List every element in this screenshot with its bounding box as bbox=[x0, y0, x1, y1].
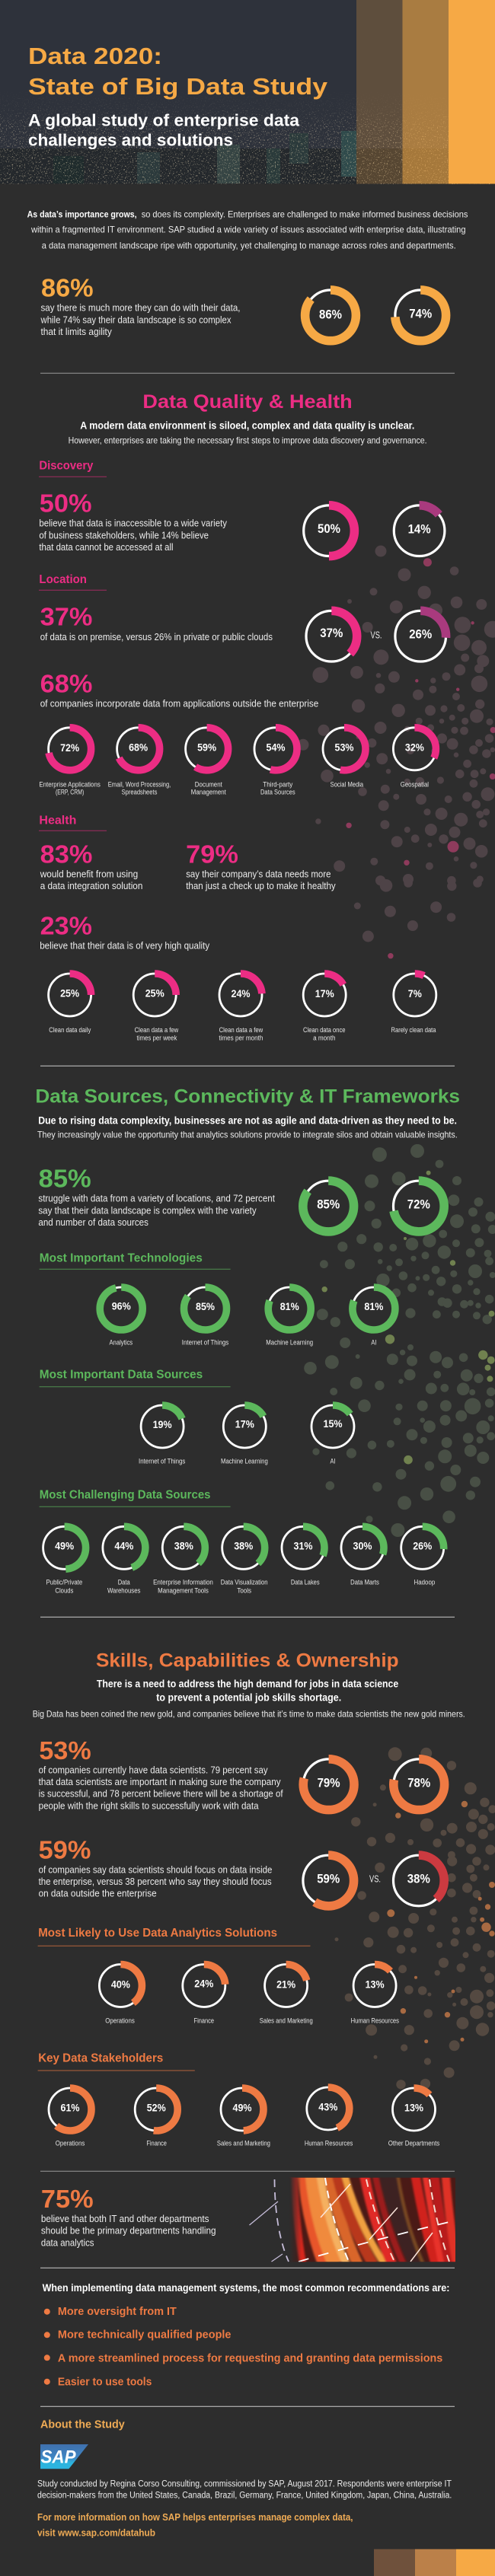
ring: 43% human resources bbox=[307, 2087, 350, 2130]
ring captions: Clean data once bbox=[303, 1026, 346, 1035]
ring group: cleaning frequency bbox=[49, 974, 436, 1043]
vs label: VS. bbox=[370, 629, 382, 640]
title: Data 2020: bbox=[28, 43, 162, 69]
vs label: VS. bbox=[369, 1873, 381, 1884]
subheading: Health: Health bbox=[39, 815, 76, 827]
stat: 83%: a data integration solution bbox=[40, 880, 142, 891]
call to action: For more information on how SAP helps enterprises manage complex data, bbox=[37, 2511, 353, 2523]
stat: 75%: data analytics bbox=[41, 2236, 94, 2248]
intro text: As data’s importance grows, bbox=[27, 209, 137, 220]
subheading: Key Data Stakeholders: Key Data Stakeholders bbox=[38, 2052, 163, 2064]
ring captions: Geospatial bbox=[401, 780, 429, 789]
subheading: Most Important Data Sources: Most Important Data Sources bbox=[40, 1368, 203, 1381]
ring captions: Other Departments bbox=[388, 2139, 439, 2147]
stat: 53%: that data scientists are important in making sure the company bbox=[39, 1776, 281, 1787]
orange stripe 1 bbox=[356, 0, 402, 184]
ring: 79%: 79% bbox=[318, 1777, 340, 1790]
intro text bbox=[27, 209, 468, 250]
ring captions: Rarely clean data bbox=[391, 1026, 436, 1035]
ring group: challenging sources bbox=[43, 1526, 444, 1595]
ring: 24% finance bbox=[183, 1964, 225, 2007]
ring captions: Operations bbox=[56, 2139, 85, 2147]
ring captions: Internet of Things bbox=[139, 1458, 186, 1466]
ring: 85% internet of things bbox=[184, 1287, 227, 1330]
subheading: Location: Location bbox=[39, 573, 87, 586]
ring: 68% email: 68% bbox=[129, 741, 148, 753]
stat: 83%: would benefit from using bbox=[40, 868, 138, 879]
ring captions: a month bbox=[313, 1035, 335, 1043]
ring: 14%: 14% bbox=[408, 523, 431, 537]
call to action bbox=[37, 2511, 353, 2539]
stat: 53%: 53% bbox=[39, 1736, 91, 1765]
stat: 85%: and number of data sources bbox=[38, 1216, 148, 1228]
ring: 72% bbox=[393, 1181, 444, 1232]
ring captions: Public/Private bbox=[46, 1579, 82, 1587]
ring captions: Data Visualization bbox=[221, 1579, 268, 1587]
ring: 50% bbox=[304, 505, 354, 556]
ring: 81% machine learning bbox=[268, 1287, 311, 1330]
ring captions: Data bbox=[118, 1579, 130, 1587]
ring: 96% analytics bbox=[100, 1287, 142, 1330]
subheading: Health bbox=[39, 815, 107, 831]
ring captions: Clouds bbox=[55, 1586, 74, 1595]
header banner bbox=[0, 0, 495, 184]
ring captions: Clean data a few bbox=[135, 1026, 178, 1035]
ring group: application sources bbox=[39, 728, 436, 797]
stat: 23% bbox=[40, 912, 210, 952]
ring: 86%: 86% bbox=[319, 308, 342, 321]
ring captions: Human Resources bbox=[305, 2139, 353, 2147]
ring: 50%: 50% bbox=[318, 522, 340, 536]
ring captions: Warehouses bbox=[107, 1586, 141, 1595]
orange stripe 3 bbox=[449, 0, 495, 184]
ring: 74% bbox=[395, 290, 446, 341]
ring: 19% internet of things: 19% bbox=[153, 1418, 172, 1430]
ring: 61% operations: 61% bbox=[61, 2101, 80, 2113]
title: State of Big Data Study bbox=[28, 73, 328, 100]
ring: 24% few times monthly bbox=[219, 974, 262, 1016]
ring captions: Human Resources bbox=[351, 2016, 399, 2025]
ring: 85%: 85% bbox=[317, 1198, 340, 1212]
stat: 86%: say there is much more they can do with their data, bbox=[41, 302, 241, 314]
stat: 59%: on data outside the enterprise bbox=[39, 1888, 157, 1899]
orange stripe 2 bbox=[402, 0, 449, 184]
stat: 50%: 50% bbox=[40, 489, 92, 517]
section intro: Due to rising data complexity, businesses are not as agile and data-driven as they need to be. bbox=[38, 1115, 457, 1127]
ring: 26% bbox=[395, 611, 446, 662]
ring: 26%: 26% bbox=[409, 628, 432, 642]
ring captions: Sales and Marketing bbox=[260, 2016, 313, 2025]
about text bbox=[37, 2480, 452, 2500]
ring: 85% bbox=[303, 1181, 354, 1232]
ring: 40% operations bbox=[99, 1964, 142, 2007]
ring group: technologies bbox=[100, 1287, 395, 1347]
ring: 79% bbox=[303, 1759, 354, 1810]
ring group: data sources bbox=[139, 1405, 354, 1466]
subtitle bbox=[28, 111, 300, 150]
ring captions: (ERP, CRM) bbox=[56, 789, 84, 797]
ring: 7% rarely: 7% bbox=[408, 987, 422, 999]
stat: 59% bbox=[39, 1835, 272, 1899]
ring: 54% third-party: 54% bbox=[267, 741, 286, 753]
ring: 81% AI: 81% bbox=[364, 1300, 384, 1312]
subheading: Most Important Technologies: Most Important Technologies bbox=[40, 1251, 203, 1264]
ring: 7% rarely bbox=[394, 974, 436, 1016]
footer stripes bbox=[374, 2549, 495, 2576]
bullet: more oversight: More oversight from IT bbox=[58, 2305, 177, 2318]
ring: 25% daily bbox=[49, 974, 91, 1016]
section intro: to prevent a potential job skills shortage. bbox=[156, 1692, 341, 1704]
city skyline photo bbox=[0, 90, 495, 184]
ring: 15% AI bbox=[311, 1405, 354, 1448]
ring: 81% machine learning: 81% bbox=[280, 1300, 299, 1312]
ring: 38% EIM tools: 38% bbox=[174, 1539, 193, 1551]
section heading: Data Quality & Health: Data Quality & Health bbox=[142, 391, 353, 413]
ring: 49% sales and marketing: 49% bbox=[233, 2102, 252, 2114]
ring: 17% machine learning: 17% bbox=[235, 1417, 254, 1430]
stat: 68%: of companies incorporate data from applications outside the enterprise bbox=[40, 697, 318, 709]
ring: 38%: 38% bbox=[407, 1873, 430, 1886]
ring captions: Data Lakes bbox=[291, 1579, 320, 1587]
ring captions: Tools bbox=[237, 1586, 251, 1595]
ring: 24% finance: 24% bbox=[194, 1978, 214, 1990]
stat: 37%: of data is on premise, versus 26% in private or public clouds bbox=[40, 631, 273, 642]
section intro: A modern data environment is siloed, complex and data quality is unclear. bbox=[80, 420, 414, 432]
stat: 37% bbox=[40, 603, 273, 642]
subheading: Most Challenging Data Sources: Most Challenging Data Sources bbox=[40, 1488, 211, 1501]
ring group: analytics users bbox=[99, 1964, 399, 2025]
ring: 74%: 74% bbox=[409, 308, 432, 321]
ring captions: Enterprise Information bbox=[153, 1579, 213, 1587]
stat: 86%: 86% bbox=[41, 273, 94, 301]
ring captions: Clean data a few bbox=[219, 1026, 263, 1035]
ring: 38% bbox=[393, 1855, 444, 1906]
ring: 21% sales and marketing: 21% bbox=[276, 1978, 296, 1990]
ring: 52% finance: 52% bbox=[147, 2101, 166, 2113]
stat: 85% bbox=[38, 1165, 275, 1228]
ring captions: Document bbox=[195, 780, 222, 789]
icon: SAP logo bbox=[40, 2444, 88, 2469]
stat: 79%: say their company’s data needs more bbox=[186, 868, 331, 879]
decorative dots: pink cluster bbox=[297, 545, 495, 942]
ring: 13% other departments bbox=[393, 2088, 436, 2131]
ring: 49% public/private clouds bbox=[43, 1526, 86, 1569]
stat: 23%: believe that their data is of very high quality bbox=[40, 940, 210, 952]
bullet: streamlined process: A more streamlined process for requesting and granting data permissions bbox=[58, 2351, 442, 2364]
stat: 85%: struggle with data from a variety of locations, and 72 percent bbox=[38, 1193, 275, 1204]
section heading: Skills, Capabilities & Ownership: Skills, Capabilities & Ownership bbox=[96, 1650, 399, 1671]
ring: 31% data lakes: 31% bbox=[294, 1539, 313, 1551]
stat: 50%: that data cannot be accessed at all bbox=[39, 541, 174, 553]
ring: 72% enterprise applications bbox=[49, 728, 91, 770]
ring: 14% bbox=[394, 505, 445, 556]
ring group: stakeholders bbox=[49, 2087, 439, 2147]
section intro bbox=[37, 1115, 458, 1140]
ring captions: times per week bbox=[137, 1035, 177, 1043]
decorative dots: orange cluster bbox=[335, 1747, 495, 2089]
ring captions: Machine Learning bbox=[221, 1458, 268, 1466]
ring: 25% weekly: 25% bbox=[145, 987, 164, 999]
stat: 75% bbox=[41, 2185, 216, 2248]
ring: 38% EIM tools bbox=[162, 1526, 205, 1569]
ring: 30% data marts bbox=[341, 1526, 384, 1569]
ring captions bbox=[46, 1579, 435, 1595]
ring: 44% data warehouses bbox=[103, 1526, 145, 1569]
ring: 59% document management bbox=[186, 728, 228, 770]
ring: 26% hadoop: 26% bbox=[413, 1539, 433, 1551]
ring captions: Email, Word Processing, bbox=[108, 780, 171, 789]
ring: 25% weekly bbox=[133, 974, 176, 1016]
ring: 37% bbox=[306, 611, 357, 662]
stat: 37%: 37% bbox=[40, 603, 93, 631]
stat: 86%: that it limits agility bbox=[41, 326, 112, 337]
ring captions bbox=[139, 1458, 335, 1466]
ring captions bbox=[105, 2016, 399, 2025]
photo: light trails bbox=[250, 2173, 457, 2265]
ring: 21% sales and marketing bbox=[265, 1964, 308, 2007]
bullet: easier tools: Easier to use tools bbox=[58, 2375, 152, 2388]
stat: 68%: 68% bbox=[40, 670, 93, 698]
stat: 53% bbox=[39, 1736, 283, 1812]
stat: 79%: 79% bbox=[186, 840, 238, 868]
bullet: more qualified people: More technically qualified people bbox=[58, 2329, 232, 2342]
stat: 79% bbox=[186, 840, 336, 891]
ring: 78% bbox=[394, 1759, 445, 1810]
ring: 15% AI: 15% bbox=[323, 1417, 343, 1430]
intro text: so does its complexity. Enterprises are challenged to make informed business decisions bbox=[142, 209, 468, 220]
ring: 37%: 37% bbox=[320, 626, 343, 640]
ring: 59% bbox=[303, 1855, 354, 1906]
ring: 13% human resources: 13% bbox=[366, 1978, 385, 1990]
ring: 40% operations: 40% bbox=[111, 1978, 130, 1990]
ring captions bbox=[109, 1339, 376, 1347]
ring: 17% machine learning bbox=[223, 1405, 266, 1448]
ring: 61% operations bbox=[49, 2088, 91, 2131]
ring: 44% data warehouses: 44% bbox=[114, 1539, 134, 1551]
ring: 86% bbox=[305, 290, 356, 341]
ring captions: Spreadsheets bbox=[122, 789, 158, 797]
ring captions: Data Marts bbox=[350, 1579, 379, 1587]
ring captions: Hadoop bbox=[414, 1579, 435, 1587]
ring captions: Enterprise Applications bbox=[39, 780, 101, 789]
ring: 32% geospatial bbox=[393, 728, 436, 770]
ring: 59% document management: 59% bbox=[197, 741, 217, 753]
subheading: Discovery bbox=[39, 460, 107, 477]
stat: 23%: 23% bbox=[40, 912, 92, 940]
subtitle: challenges and solutions bbox=[28, 131, 233, 150]
ring captions: times per month bbox=[219, 1035, 263, 1043]
ring captions: Management bbox=[191, 789, 226, 797]
stat: 86%: while 74% say their data landscape is so complex bbox=[40, 314, 232, 325]
intro text: within a fragmented IT environment. SAP studied a wide variety of issues associated with enterprise data, illustrating bbox=[30, 225, 466, 235]
stat: 50%: believe that data is inaccessible to a wide variety bbox=[39, 518, 227, 529]
ring: 52% finance bbox=[135, 2088, 177, 2131]
ring: 53% social media bbox=[323, 728, 366, 770]
stat: 86% bbox=[40, 273, 241, 337]
title bbox=[28, 43, 328, 100]
about text: Study conducted by Regina Corso Consulting, commissioned by SAP, August 2017. Respondents were enterprise IT bbox=[37, 2480, 452, 2489]
ring captions: Sales and Marketing bbox=[217, 2139, 270, 2147]
ring: 85% internet of things: 85% bbox=[196, 1300, 215, 1312]
ring captions bbox=[39, 780, 429, 797]
ring captions: AI bbox=[371, 1339, 376, 1347]
ring captions: Machine Learning bbox=[266, 1339, 313, 1347]
stat: 75%: 75% bbox=[41, 2185, 94, 2213]
subheading: Discovery: Discovery bbox=[39, 460, 93, 473]
ring: 54% third-party bbox=[254, 728, 297, 770]
dashed lane line bbox=[274, 2179, 289, 2262]
ring captions: AI bbox=[331, 1458, 335, 1466]
ring captions: Social Media bbox=[331, 780, 364, 789]
stat: 75%: should be the primary departments handling bbox=[41, 2225, 216, 2236]
subheading: Most Likely to Use Data Analytics Solutions: Most Likely to Use Data Analytics Solutions bbox=[38, 1927, 277, 1940]
ring: 59%: 59% bbox=[317, 1873, 340, 1886]
ring: 30% data marts: 30% bbox=[353, 1539, 372, 1551]
heading: About the Study: About the Study bbox=[40, 2418, 125, 2431]
ring: 17% monthly: 17% bbox=[315, 987, 334, 999]
stat: 75%: believe that both IT and other departments bbox=[41, 2213, 209, 2224]
ring captions: Clean data daily bbox=[49, 1026, 91, 1035]
ring: 13% human resources bbox=[353, 1964, 396, 2007]
about text: decision-makers from the United States, Canada, Brazil, Germany, France, United Kingdom, Japan, China, Australia. bbox=[37, 2491, 452, 2500]
recommendations heading: When implementing data management systems, the most common recommendations are: bbox=[43, 2282, 449, 2294]
decorative dots: pink accents bbox=[346, 558, 495, 958]
ring: 96% analytics: 96% bbox=[112, 1300, 131, 1312]
section intro bbox=[33, 1679, 465, 1719]
ring: 17% monthly bbox=[303, 974, 346, 1016]
ring: 31% data lakes bbox=[282, 1526, 324, 1569]
stat: 79%: than just a check up to make it healthy bbox=[186, 880, 336, 891]
icon: SAP logo: SAP bbox=[41, 2447, 76, 2468]
section intro: There is a need to address the high demand for jobs in data science bbox=[97, 1679, 399, 1690]
stat: 59%: the enterprise, versus 38 percent who say they should focus bbox=[39, 1876, 272, 1887]
stat: 50% bbox=[39, 489, 227, 553]
ring captions: Finance bbox=[194, 2016, 214, 2025]
recommendations list bbox=[44, 2305, 442, 2388]
ring: 81% AI bbox=[353, 1287, 395, 1330]
ring captions: Finance bbox=[146, 2139, 167, 2147]
stat: 53%: of companies currently have data scientists. 79 percent say bbox=[39, 1764, 268, 1775]
ring captions: Data Sources bbox=[260, 789, 295, 797]
stat: 53%: people with the right skills to successfully work with data bbox=[39, 1800, 259, 1812]
ring captions bbox=[49, 1026, 436, 1043]
ring captions: Third-party bbox=[263, 780, 292, 789]
ring: 72% enterprise applications: 72% bbox=[60, 741, 80, 754]
stat: 53%: is successful, and 78 percent believe there will be a shortage of bbox=[39, 1788, 283, 1800]
ring: 49% sales and marketing bbox=[221, 2088, 263, 2131]
ring: 13% other departments: 13% bbox=[404, 2101, 423, 2113]
stat: 50%: of business stakeholders, while 14% believe bbox=[39, 529, 209, 540]
ring: 25% daily: 25% bbox=[60, 987, 80, 999]
stat: 85%: 85% bbox=[39, 1165, 91, 1193]
ring: 49% public/private clouds: 49% bbox=[55, 1539, 75, 1551]
ring: 38% visualization tools: 38% bbox=[234, 1539, 254, 1551]
decorative dots: orange accents bbox=[387, 1801, 495, 2043]
ring: 19% internet of things bbox=[141, 1405, 184, 1448]
stat: 85%: say that their data landscape is complex with the variety bbox=[38, 1204, 257, 1216]
stat: 59%: 59% bbox=[39, 1835, 91, 1863]
stat: 59%: of companies say data scientists should focus on data inside bbox=[39, 1863, 272, 1875]
subtitle: A global study of enterprise data bbox=[28, 111, 300, 130]
ring: 24% few times monthly: 24% bbox=[232, 987, 251, 999]
section heading: Data Sources, Connectivity & IT Frameworks: Data Sources, Connectivity & IT Frameworks bbox=[35, 1086, 460, 1107]
subheading: Location bbox=[39, 573, 107, 590]
ring captions: Operations bbox=[105, 2016, 135, 2025]
diagonal light lines bbox=[250, 2201, 283, 2262]
section intro bbox=[69, 420, 427, 446]
ring captions: Internet of Things bbox=[182, 1339, 228, 1347]
stat: 83%: 83% bbox=[40, 840, 93, 868]
ring captions: Analytics bbox=[109, 1339, 133, 1347]
ring: 68% email bbox=[117, 728, 160, 770]
decorative dots: green cluster bbox=[304, 1144, 495, 1537]
call to action: visit www.sap.com/datahub bbox=[37, 2527, 155, 2539]
decorative dots: green accents bbox=[321, 1171, 495, 1464]
ring: 26% hadoop bbox=[401, 1526, 444, 1569]
ring: 72%: 72% bbox=[407, 1198, 430, 1212]
ring: 53% social media: 53% bbox=[335, 741, 354, 753]
ring: 78%: 78% bbox=[407, 1777, 430, 1790]
ring: 38% visualization tools bbox=[222, 1526, 265, 1569]
ring: 32% geospatial: 32% bbox=[405, 741, 424, 753]
ring captions bbox=[56, 2139, 439, 2147]
stat: 68% bbox=[40, 670, 318, 709]
ring captions: Management Tools bbox=[158, 1586, 209, 1595]
section intro: However, enterprises are taking the necessary first steps to improve data discovery and governance. bbox=[69, 435, 427, 446]
ring: 43% human resources: 43% bbox=[318, 2100, 338, 2112]
stat: 83% bbox=[40, 840, 142, 891]
intro text: a data management landscape ripe with opportunity, yet challenging to manage across roles and departments. bbox=[42, 240, 456, 250]
